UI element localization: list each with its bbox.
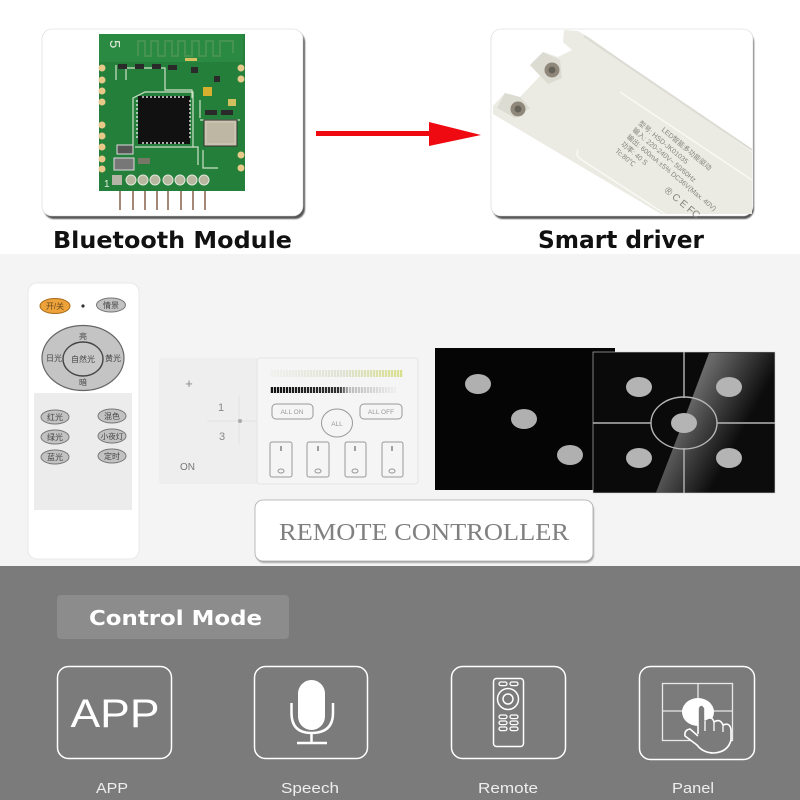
lower key panel: 混色 [104,411,120,421]
dial [42,326,124,390]
heading: bluetooth module: Bluetooth Module [53,228,292,254]
icon: circuit board [98,34,245,210]
dial: 日光 [46,353,62,363]
icon: touch panel [640,666,754,760]
label: panel: Panel [672,780,714,797]
crystal [204,120,237,146]
icon: led driver housing [493,30,752,227]
panel: bluetooth module card [42,29,305,219]
dial: 自然光 [71,354,95,364]
middle section background [0,254,800,566]
chip [138,96,190,144]
lower key panel [34,393,132,510]
icon: app: APP [70,692,160,736]
label: speech: Speech [281,780,339,797]
dial: 黄光 [105,353,121,363]
heading: control mode: Control Mode [89,606,262,630]
dial: 暗 [79,377,87,387]
lower key panel: 绿光 [47,432,63,442]
lower key panel: 小夜灯 [101,431,124,441]
panel: handheld remote [28,283,139,559]
icon: app [58,666,172,758]
panel: white touch panel left: 1 [218,402,224,414]
printed label [613,111,736,227]
button: power: 开/关 [46,301,64,311]
callout: remote controller label [255,500,594,563]
panel: black glass switch three buttons [435,348,615,490]
panel: black glass switch five buttons [593,352,775,493]
top section background [0,0,800,254]
panel: smart driver card [491,29,754,227]
printed label: 功率: 40 S [619,139,650,167]
printed label: LED智能多功能驱动 [660,125,714,172]
panel: white touch panel right: ALL OFF [368,409,394,416]
panel: white touch panel right: ALL [331,421,343,428]
smd parts [117,145,133,154]
lower key panel: 红光 [47,412,63,422]
lower key panel: 蓝光 [47,452,63,462]
panel: white touch panel left [159,358,258,484]
bottom section background [0,566,800,800]
panel: white touch panel right: ALL ON [281,409,304,416]
printed label: 输出: 600mA ±5% DC36V(Max. 40V) [625,132,718,213]
panel: white touch panel left: 3 [219,431,225,443]
printed label: 型号: HSD-JK01035 [637,119,690,166]
printed label: Tc:80℃ [613,147,637,168]
button: scene [96,298,126,312]
panel: white touch panel right [257,358,418,484]
panel: white touch panel left: ON [180,462,195,473]
dial: 亮 [79,331,87,341]
heading: control mode [57,595,289,639]
label: remote: Remote [478,780,538,797]
panel: white touch panel left: + [185,376,193,391]
icon: circuit board: 1 [104,179,110,190]
icon: remote control [452,666,566,758]
header pads [112,175,122,185]
icon: circuit board: 5 [106,40,123,48]
printed label: 输入: 220-240V~ 50/60Hz [631,126,698,184]
heading: smart driver: Smart driver [538,226,704,254]
printed label: ® C E FC [662,185,702,221]
label: app: APP [96,780,128,797]
lower key panel: 定时 [104,451,120,461]
screws [510,62,560,116]
button: power [40,298,70,314]
arrow: module to driver [316,122,481,146]
callout: remote controller label: REMOTE CONTROLLER [279,520,569,546]
icon: speech microphone [254,666,368,758]
button: scene: 情景 [103,300,119,310]
